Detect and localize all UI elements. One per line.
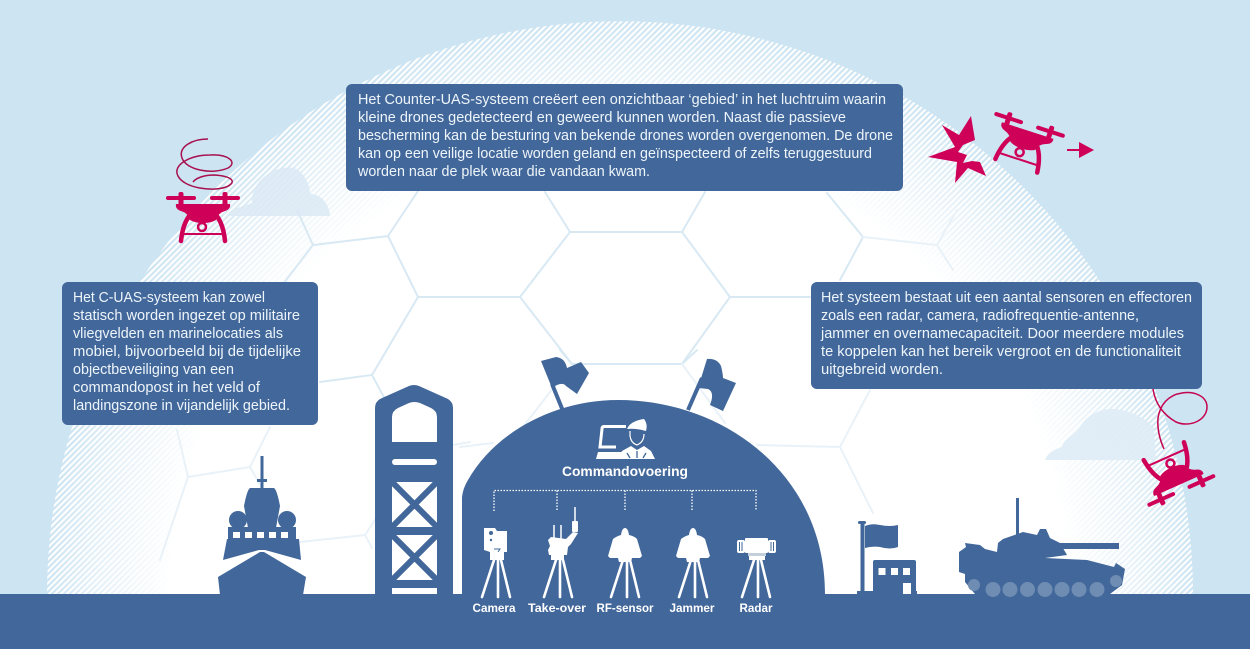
text box: top: worden naar de plek waar die vandaan kwam. — [357, 164, 650, 180]
cloud right — [1045, 409, 1156, 460]
text box: top: Het Counter-UAS-systeem creëert een onzichtbaar ‘gebied’ in het luchtruim waarin — [358, 92, 886, 108]
explosion — [928, 116, 986, 183]
text box: left — [62, 282, 318, 425]
drone spinning (left) — [166, 139, 240, 241]
icon: commander at laptop — [596, 419, 655, 459]
watch tower — [375, 385, 453, 594]
command dome — [462, 400, 825, 594]
text box: right: uitgebreid worden. — [821, 362, 943, 378]
label: Camera: Camera — [472, 601, 516, 615]
outpost with flag — [857, 521, 917, 594]
ship — [218, 456, 306, 595]
ground — [0, 594, 1250, 649]
text box: left: Het C-UAS-systeem kan zowel — [73, 290, 265, 306]
flag right — [688, 359, 736, 411]
text box: right: zoals een radar, camera, radiofrequentie-antenne, — [821, 308, 1139, 324]
text box: left: landingszone in vijandelijk gebied. — [73, 398, 290, 414]
module: radar — [737, 538, 776, 597]
drone hit (right) — [981, 108, 1067, 177]
label: RF-sensor: RF-sensor — [596, 601, 654, 615]
text box: left: objectbeveiliging van een — [73, 362, 234, 378]
label: Take-over: Take-over — [528, 601, 586, 615]
text box: right: jammer en overnamecapaciteit. Door meerdere modules — [820, 326, 1184, 342]
tank — [959, 498, 1125, 597]
text box: left: mobiel, bijvoorbeeld bij de tijdelijke — [73, 344, 301, 360]
text box: left: vliegvelden en marinelocaties als — [73, 326, 283, 342]
flag left — [541, 357, 589, 411]
module: camera — [482, 528, 510, 597]
text box: left: commandopost in het veld of — [73, 380, 261, 396]
module: jammer — [676, 528, 710, 597]
text box: right — [811, 282, 1202, 389]
text box: right: Het systeem bestaat uit een aantal sensoren en effectoren — [821, 290, 1192, 306]
text box: left: statisch worden ingezet op militaire — [73, 308, 300, 324]
text box: top: bescherming kan de besturing van bekende drones worden overgenomen. De drone — [358, 128, 893, 144]
label: Radar: Radar — [740, 601, 773, 615]
label: Jammer: Jammer — [670, 601, 715, 615]
cloud left — [226, 167, 330, 216]
module: take-over — [544, 507, 578, 597]
heading: Commandovoering: Commandovoering — [562, 463, 688, 479]
text box: top — [346, 84, 903, 191]
drone falling (lower right) — [1130, 389, 1218, 511]
network connector — [494, 490, 756, 511]
arrow — [1067, 142, 1094, 158]
text box: right: te koppelen kan het bereik vergroot en de functionaliteit — [821, 344, 1181, 360]
text box: top: kleine drones gedetecteerd en geweerd kunnen worden. Naast die passieve — [358, 110, 846, 126]
text box: top: kan op een veilige locatie worden geland en geïnspecteerd of zelfs teruggestuurd — [358, 146, 872, 162]
module: RF-sensor — [608, 528, 642, 597]
